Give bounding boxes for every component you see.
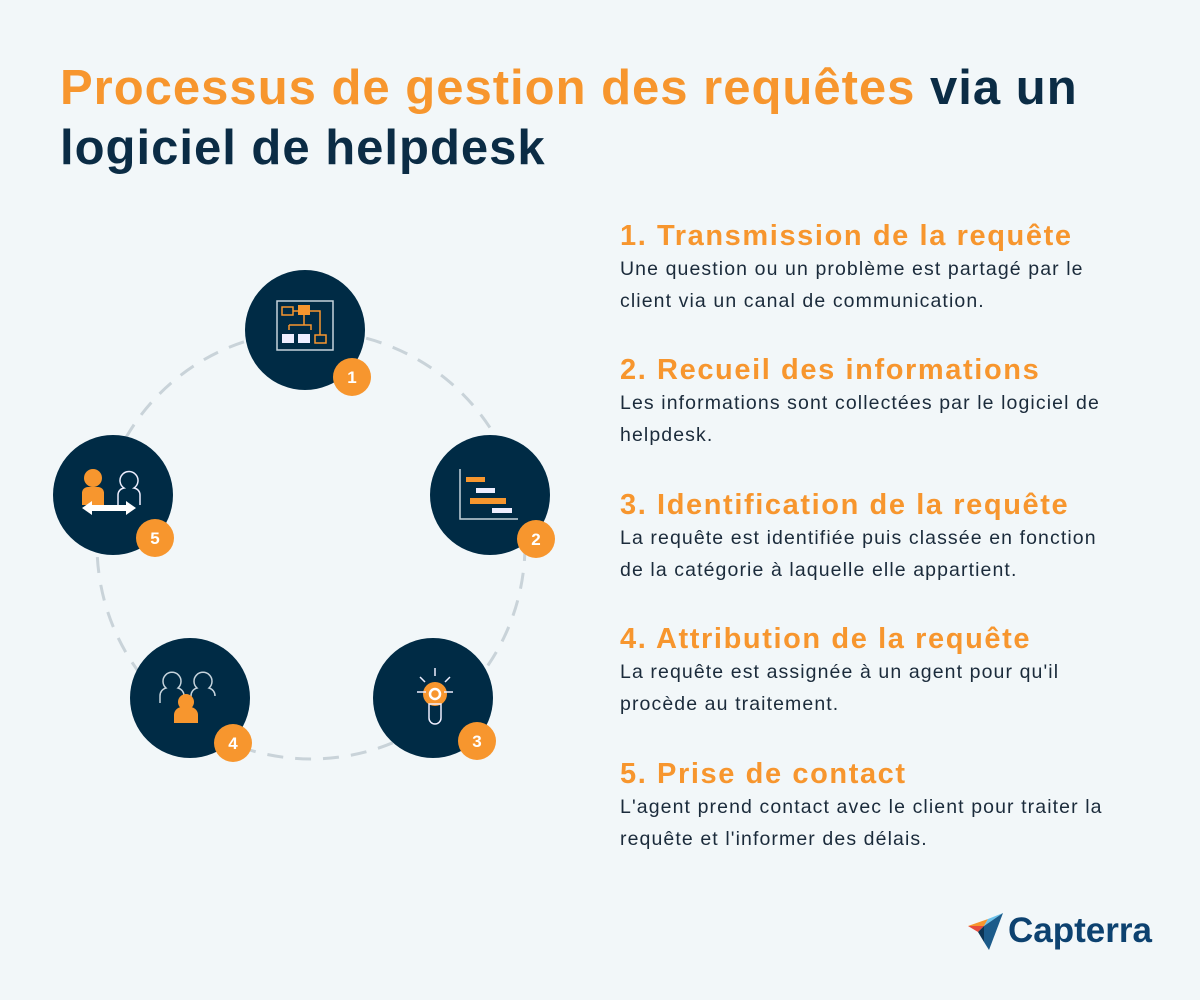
- step 5 text: requête et l'informer des délais.: [620, 828, 928, 850]
- step 5 text: 5. Prise de contact: [620, 758, 907, 790]
- title: logiciel de helpdesk: [60, 121, 546, 175]
- node 4: [130, 638, 252, 762]
- step 3 text: [620, 489, 1097, 581]
- node 2: [430, 435, 555, 558]
- step 4 text: La requête est assignée à un agent pour qu'il: [620, 661, 1059, 683]
- title: Processus de gestion des requêtes via un: [60, 61, 1078, 115]
- node 5: [53, 435, 174, 557]
- node 1: [245, 270, 371, 396]
- node 2: 2: [531, 530, 541, 549]
- step 2 text: 2. Recueil des informations: [620, 354, 1040, 386]
- node 3: 3: [472, 732, 482, 751]
- step 4 text: 4. Attribution de la requête: [620, 623, 1031, 655]
- logo: Capterra: Capterra: [1008, 911, 1152, 950]
- node 1: 1: [347, 368, 357, 387]
- step 1 text: 1. Transmission de la requête: [620, 220, 1073, 252]
- step 4 text: procède au traitement.: [620, 693, 839, 715]
- step 5 text: [620, 758, 1103, 850]
- step 1 text: Une question ou un problème est partagé par le: [620, 258, 1084, 280]
- step 4 text: [620, 623, 1059, 715]
- title: [60, 61, 1078, 175]
- step 3 text: 3. Identification de la requête: [620, 489, 1069, 521]
- step 3 text: La requête est identifiée puis classée en fonction: [620, 527, 1097, 549]
- node 3: [373, 638, 496, 760]
- step 2 text: Les informations sont collectées par le logiciel de: [620, 392, 1100, 414]
- step 3 text: de la catégorie à laquelle elle appartient.: [620, 559, 1017, 581]
- step 5 text: L'agent prend contact avec le client pour traiter la: [620, 796, 1103, 818]
- step 2 text: [620, 354, 1100, 446]
- step 1 text: [620, 220, 1084, 312]
- step 2 text: helpdesk.: [620, 424, 713, 446]
- node 5: 5: [150, 529, 160, 548]
- node 4: 4: [228, 734, 238, 753]
- cycle diagram: [53, 270, 555, 762]
- step 1 text: client via un canal de communication.: [620, 290, 985, 312]
